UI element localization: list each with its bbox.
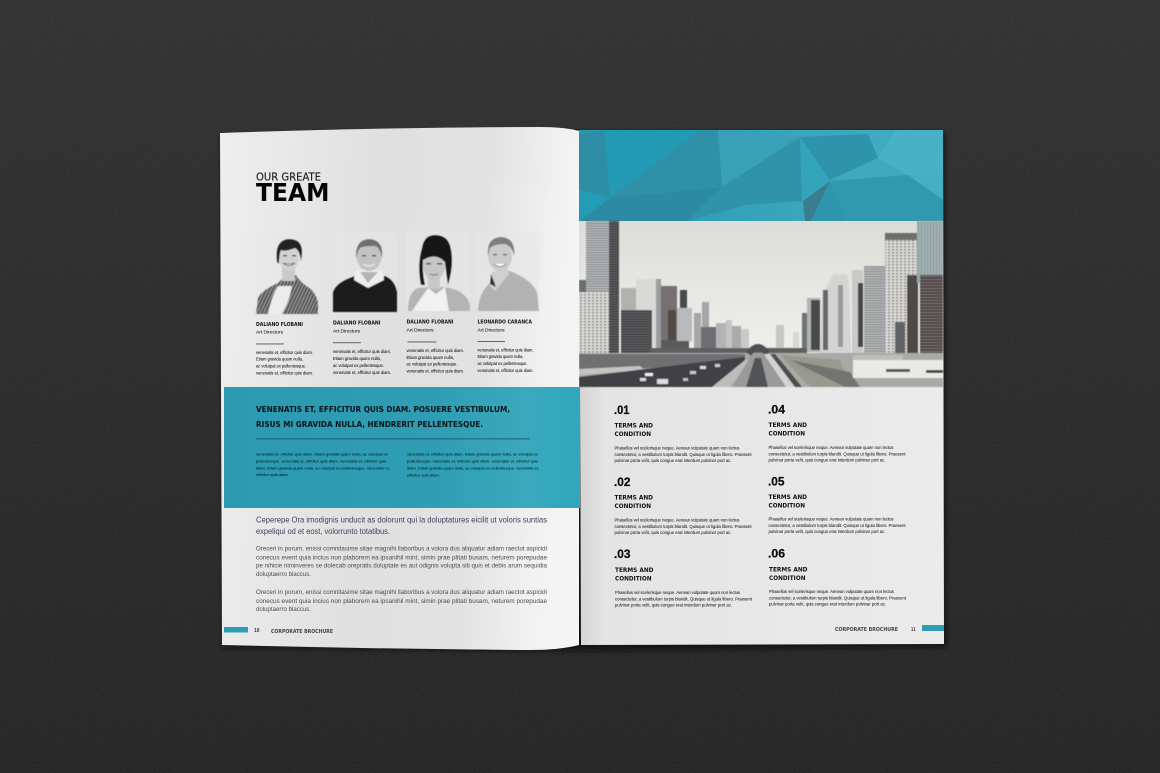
terms item 02: CONDITION [614, 502, 651, 510]
terms item 01: consectetur, a vestibulum turpis blandit. Quisque ut ligula libero. Praesent [614, 452, 752, 457]
right towers [776, 221, 943, 359]
team member 4 [477, 231, 539, 373]
terms item 05: CONDITION [768, 502, 805, 510]
team member 1: Etiam gravida quam nulla, [256, 357, 303, 362]
panel: right page [579, 130, 944, 645]
lead paragraph [256, 516, 547, 536]
team member 4: Etiam gravida quam nulla, [478, 354, 524, 359]
terms item 01: TERMS AND [614, 422, 654, 430]
terms item 04: pulvinar porta velit, quis congue erat interdum pulvinar port ac. [768, 458, 886, 462]
team member 2: Etiam gravida quam nulla, [333, 356, 381, 361]
teal callout band [224, 387, 580, 508]
team member 4: ac volutpat ex pellentesque. [478, 361, 528, 366]
terms item 06: CONDITION [769, 574, 806, 582]
team member 3: DALIANO FLOBANI [406, 320, 454, 326]
terms item 05 [768, 474, 906, 534]
brochure shadow [221, 132, 946, 651]
teal callout band: efficitur quis diam. [407, 472, 440, 478]
geometric teal header [579, 130, 943, 221]
terms item 03: pulvinar porta velit, quis congue erat interdum pulvinar port ac. [615, 602, 732, 608]
terms item 06: pulvinar porta velit, quis congue erat interdum pulvinar port ac. [769, 602, 886, 606]
terms item 04: TERMS AND [768, 421, 808, 429]
city skyline photo [579, 221, 943, 387]
terms item 06 [768, 546, 907, 606]
left page footer: 10 [254, 628, 260, 634]
team member 3: venenatis et, efficitur quis diam. [406, 348, 464, 353]
terms item 01: .01 [614, 403, 630, 417]
terms item 02: Phasellus vel scelerisque neque. Aenean vulputate quam non lectus [614, 518, 740, 522]
terms item 05: TERMS AND [768, 493, 808, 501]
terms item 02: .02 [614, 475, 631, 489]
team member 3: Art Directors [406, 328, 434, 332]
team member 1: Art Directors [256, 330, 284, 334]
teal callout band: venenatis et, efficitur quis diam. Etiam gravida quam nulla, ac volutpat ex [407, 452, 538, 456]
terms item 03 [614, 547, 753, 608]
terms item 06: TERMS AND [769, 566, 808, 574]
team member 1: ac volutpat ex pellentesque. [256, 364, 306, 369]
teal callout band: efficitur quis diam. [256, 472, 289, 477]
terms item 01: CONDITION [614, 430, 651, 438]
portrait 4 [477, 231, 539, 311]
team member 3: ac volutpat ex pellentesque. [406, 362, 458, 366]
team member 3: Etiam gravida quam nulla, [406, 355, 454, 360]
portrait 1 [256, 234, 318, 314]
team member 3 [406, 231, 470, 374]
right page footer: CORPORATE BROCHURE [835, 627, 898, 633]
terms item 03: CONDITION [615, 574, 652, 582]
team member 4: venenatis et, efficitur quis diam. [478, 368, 534, 373]
terms item 03: .03 [614, 547, 631, 561]
terms item 04: consectetur, a vestibulum turpis blandit. Quisque ut ligula libero. Praesent [768, 451, 906, 456]
lead paragraph: expeliqui od et eost, volorrunto totatibus. [256, 527, 390, 536]
heading: our greate team: OUR GREATE [256, 172, 321, 184]
terms item 01 [614, 403, 752, 463]
terms item 06: Phasellus vel scelerisque neque. Aenean vulputate quam non lectus [769, 589, 894, 594]
team member 2: DALIANO FLOBANI [333, 320, 381, 326]
terms item 03: TERMS AND [615, 566, 654, 574]
body paragraph 2: Oreceri in porum, enissi comnitasime sitae magnihi llaboribus a volora dus aliquatur adiam raectot aspicidi [256, 589, 547, 596]
teal callout band: pellentesque. venenatis et, efficitur quis diam. venenatis et, efficitur quis [256, 458, 386, 464]
body paragraph 2: conecus event quia incius non plaborem ea ipsanihil mint, simin prae plitati busam, neturem porepudae [256, 598, 548, 605]
body paragraph 1: conecus event quia incius non plaborem ea ipsanihil mint, simin prae plitati busam, neturem porepudae [256, 554, 548, 562]
team member 1: venenatis et, efficitur quis diam. [256, 350, 313, 355]
panel: left page [220, 127, 580, 650]
terms item 01: Phasellus vel scelerisque neque. Aenean vulputate quam non lectus [614, 446, 740, 450]
terms item 04: CONDITION [768, 430, 805, 438]
terms item 05: Phasellus vel scelerisque neque. Aenean vulputate quam non lectus [768, 516, 894, 522]
team member 1: DALIANO FLOBANI [256, 322, 303, 328]
body paragraph 2: doluptaerro blaccus. [256, 606, 311, 613]
body paragraph 1: pe nihicie niminveres se dolecab orepratis doluptate es aut odignis volupta siti quis et debis arum sequidia [256, 562, 548, 570]
terms item 02: TERMS AND [614, 494, 654, 502]
terms item 02 [614, 475, 752, 535]
team member 3: venenatis et, efficitur quis diam. [406, 368, 464, 374]
terms item 03: consectetur, a vestibulum turpis blandit. Quisque ut ligula libero. Praesent [615, 596, 753, 601]
terms item 05: consectetur, a vestibulum turpis blandit. Quisque ut ligula libero. Praesent [768, 523, 906, 528]
left page footer [224, 627, 333, 635]
terms item 01: pulvinar porta velit, quis congue erat interdum pulvinar port ac. [614, 458, 732, 463]
team member 2: ac volutpat ex pellentesque. [333, 363, 384, 368]
terms item 06: .06 [768, 546, 785, 560]
portrait 2 [333, 232, 397, 312]
team member 2: venenatis et, efficitur quis diam. [333, 349, 391, 354]
terms item 03: Phasellus vel scelerisque neque. Aenean vulputate quam non lectus [615, 590, 740, 595]
team member 4: LEONARDO CARANCA [478, 320, 532, 326]
terms item 05: .05 [768, 474, 785, 488]
team member 1: venenatis et, efficitur quis diam. [256, 371, 313, 376]
team member 4: Art Directors [478, 328, 505, 332]
body paragraph 2 [256, 589, 548, 613]
teal callout band: venenatis et, efficitur quis diam. Etiam gravida quam nulla, ac volutpat ex [256, 452, 388, 456]
highway ground [579, 344, 943, 387]
team member 1 [256, 234, 318, 376]
terms item 04 [768, 402, 906, 462]
team member 2: venenatis et, efficitur quis diam. [333, 370, 391, 375]
team member 4: venenatis et, efficitur quis diam. [478, 348, 534, 352]
terms item 06: consectetur, a vestibulum turpis blandit. Quisque ut ligula libero. Praesent [769, 595, 907, 600]
body paragraph 1 [256, 546, 548, 578]
body paragraph 1: Oreceri in porum, enissi comnitasime sitae magnihi llaboribus a volora dus aliquatur adiam raectot aspicidi [256, 546, 547, 552]
teal callout band: RISUS MI GRAVIDA NULLA, HENDRERIT PELLENTESQUE. [256, 420, 483, 429]
heading: our greate team: TEAM [256, 178, 330, 207]
terms item 05: pulvinar porta velit, quis congue erat interdum pulvinar port ac. [768, 529, 886, 534]
terms item 02: pulvinar porta velit, quis congue erat interdum pulvinar port ac. [614, 530, 732, 535]
left page footer: CORPORATE BROCHURE [271, 629, 333, 635]
teal callout band: pellentesque. venenatis et, efficitur quis diam. venenatis et, efficitur quis [407, 458, 538, 464]
right page footer [835, 625, 944, 633]
teal callout band: diam. Etiam gravida quam nulla, ac volutpat ex pellentesque. venenatis et, [256, 466, 390, 470]
team member 2 [333, 232, 397, 375]
portrait 3 [406, 231, 470, 311]
teal callout band: VENENATIS ET, EFFICITUR QUIS DIAM. POSUERE VESTIBULUM, [256, 405, 510, 414]
lead paragraph: Ceperepe Ora imodignis unducit as dolorunt qui la doluptatures eicilit ut voloris suntias [256, 516, 547, 524]
body paragraph 1: doluptaerro blaccus. [256, 571, 311, 578]
team member 2: Art Directors [333, 328, 361, 334]
right page footer: 11 [911, 627, 916, 633]
left towers [579, 221, 749, 358]
terms item 02: consectetur, a vestibulum turpis blandit. Quisque ut ligula libero. Praesent [614, 524, 752, 529]
terms item 04: Phasellus vel scelerisque neque. Aenean vulputate quam non lectus [768, 445, 894, 450]
terms item 04: .04 [768, 402, 785, 416]
teal callout band: diam. Etiam gravida quam nulla, ac volutpat ex pellentesque. venenatis et, [407, 466, 539, 470]
